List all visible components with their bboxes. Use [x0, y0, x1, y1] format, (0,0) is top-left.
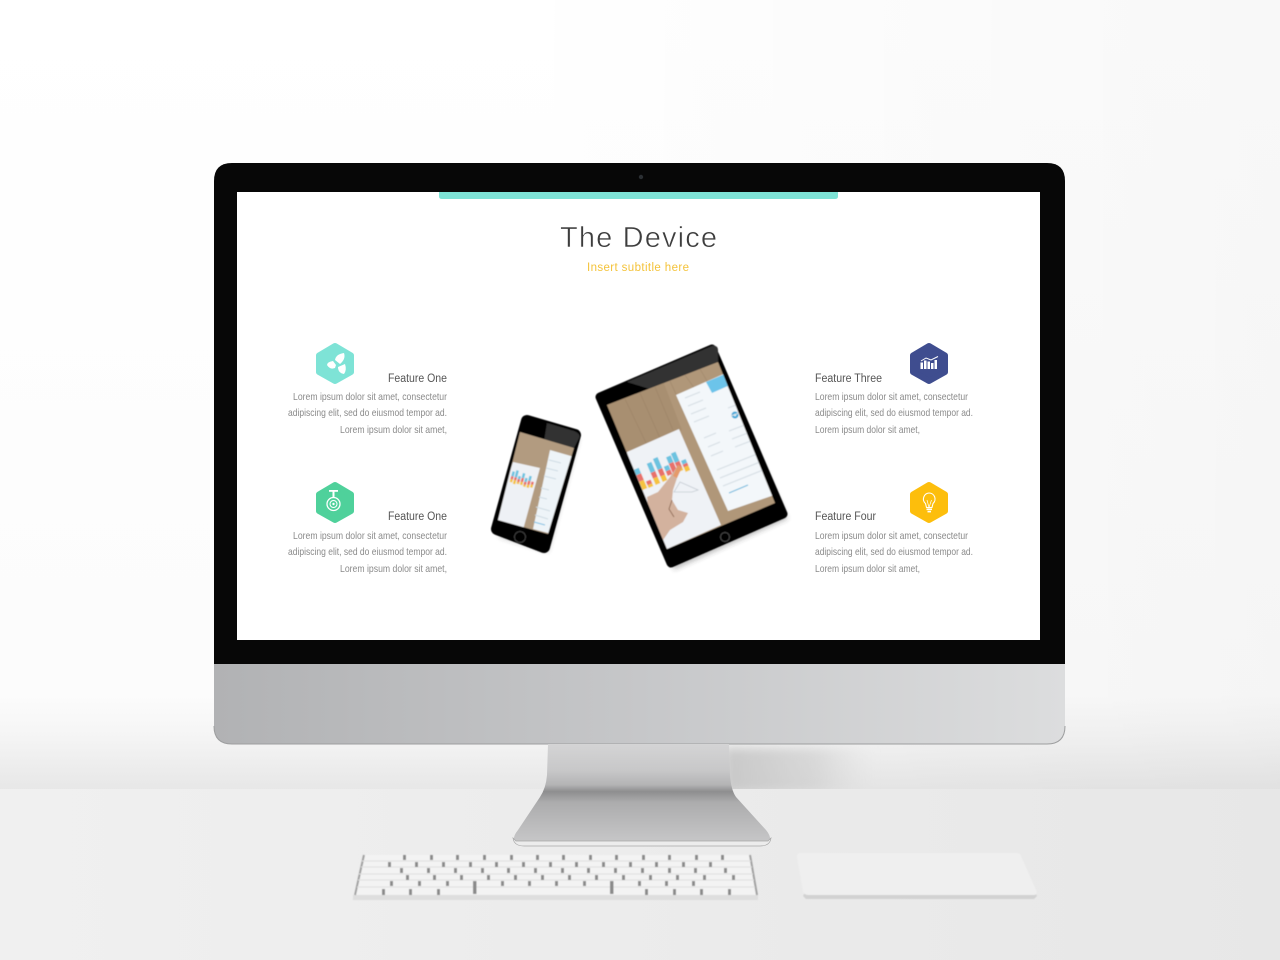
tablet screen contents: [606, 361, 776, 550]
phone screen contents: [497, 431, 575, 535]
accent bar: [439, 192, 838, 199]
feature block: Feature Four: [815, 485, 973, 575]
slide screen: [237, 192, 1040, 640]
phone charts paper: [494, 462, 540, 530]
body text: Lorem ipsum dolor sit amet,: [815, 425, 920, 436]
tablet body: [600, 349, 783, 563]
body text: Lorem ipsum dolor sit amet, consectetur: [815, 392, 968, 403]
title: The Device: [560, 222, 717, 254]
tablet blue badge: [732, 412, 738, 418]
tablet wood grain: [625, 369, 710, 447]
tablet sketch on paper: [674, 482, 698, 492]
body text: adipiscing elit, sed do eiusmod tempor ad.: [288, 547, 447, 558]
tablet shadow: [603, 353, 788, 570]
tablet charts paper: [627, 429, 721, 549]
body text: adipiscing elit, sed do eiusmod tempor ad.: [288, 408, 447, 419]
phone body: [497, 421, 575, 547]
phone mockup: [490, 421, 585, 552]
monitor stand: [513, 744, 771, 846]
tablet document header: [706, 374, 730, 393]
tablet chart bars: [634, 452, 690, 490]
key gaps: [382, 855, 735, 895]
body text: Lorem ipsum dolor sit amet, consectetur: [815, 531, 968, 542]
stand base edge: [513, 838, 771, 846]
keyboard side edges: [355, 855, 757, 895]
monitor shadow on wall: [725, 748, 875, 792]
phone shadow: [499, 425, 579, 552]
monitor: [214, 163, 1065, 744]
trackpad shadow edge: [803, 894, 1037, 899]
body text: Lorem ipsum dolor sit amet,: [340, 425, 447, 436]
heading: Feature Four: [815, 511, 876, 523]
subtitle: Insert subtitle here: [587, 262, 689, 274]
icon: navy hexagon with bar chart: [913, 346, 945, 381]
phone chart bars: [509, 469, 536, 489]
body text: [288, 531, 447, 575]
tablet hand: [647, 465, 688, 548]
tablet mockup: [600, 346, 788, 570]
phone glare: [544, 423, 579, 448]
tablet document lines: [685, 392, 768, 493]
body text: Lorem ipsum dolor sit amet,: [340, 564, 447, 575]
keyboard body: [353, 855, 758, 900]
body text: Lorem ipsum dolor sit amet, consectetur: [293, 392, 447, 403]
keyboard: [353, 855, 758, 900]
monitor bezel: [214, 163, 1065, 664]
trackpad: [797, 853, 1037, 899]
trackpad surface: [797, 853, 1037, 895]
icon: teal hexagon with triad glyph: [319, 346, 351, 381]
icon: yellow hexagon with light bulb: [913, 485, 945, 520]
tablet home button: [720, 532, 730, 542]
monitor chin: [214, 660, 1065, 744]
body text: Lorem ipsum dolor sit amet, consectetur: [293, 531, 447, 542]
webcam: [639, 175, 643, 179]
body text: [288, 392, 447, 436]
feature block: Feature One top: [288, 346, 447, 436]
body text: adipiscing elit, sed do eiusmod tempor ad.: [815, 408, 973, 419]
phone home button: [514, 532, 526, 542]
feature block: Feature One bottom: [288, 485, 447, 575]
tablet glare: [627, 346, 718, 390]
heading: Feature One: [388, 373, 447, 385]
feature block: Feature Three: [815, 346, 973, 436]
key row lines: [357, 861, 755, 887]
body text: Lorem ipsum dolor sit amet,: [815, 564, 920, 575]
phone document: [533, 450, 578, 534]
icon: green hexagon with stopwatch: [319, 485, 351, 520]
chin bottom edge: [214, 726, 1065, 744]
stand foot and neck: [514, 744, 770, 841]
body text: [815, 392, 973, 436]
body text: [815, 531, 973, 575]
heading: Feature One: [388, 511, 447, 523]
phone document lines: [534, 460, 561, 525]
tablet document: [676, 372, 780, 511]
keyboard bottom edge: [353, 895, 758, 900]
heading: Feature Three: [815, 373, 882, 385]
body text: adipiscing elit, sed do eiusmod tempor ad.: [815, 547, 973, 558]
